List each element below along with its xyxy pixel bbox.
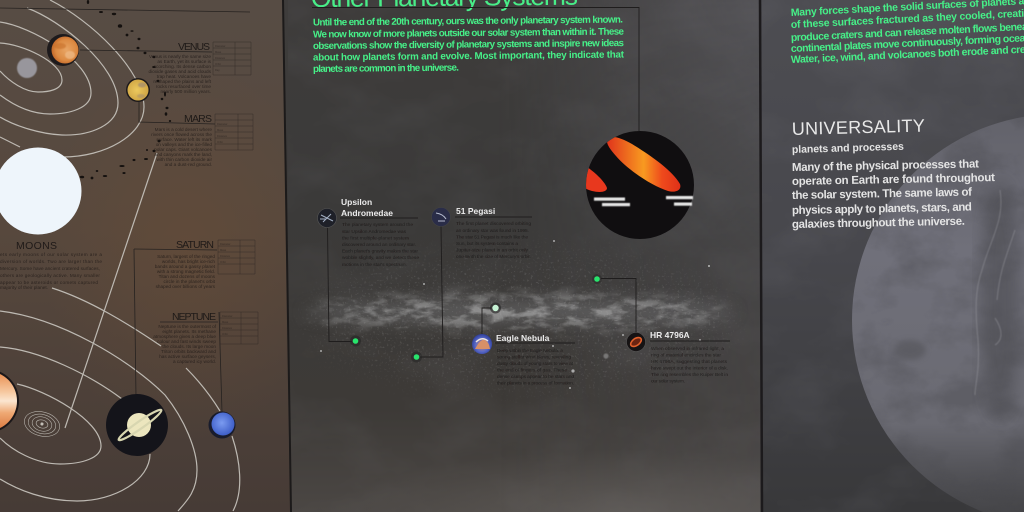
universality body text: operate on Earth are found throughout [792, 172, 995, 188]
surfaces text [791, 0, 1024, 66]
system: Eagle Nebula: the end of fingers of gas. These [497, 368, 567, 374]
central small disk [17, 58, 37, 78]
intro text: Until the end of the 20th century, ours was the only planetary system known. [313, 15, 623, 28]
label: Saturn: shaped over billions of years [156, 284, 216, 289]
system: 51 Pegasi: one-tenth the size of Mercury's orbit. [456, 254, 531, 260]
label: Venus: VENUS [178, 41, 210, 53]
label: Mars: with thin carbon dioxide air [156, 157, 212, 162]
panel: other planetary systems [283, 0, 762, 512]
table: Neptune: Mass [222, 320, 229, 324]
image: hot planet disks [582, 131, 694, 239]
structural lines [0, 8, 250, 412]
background planet [850, 110, 1024, 512]
system: 51 Pegasi: an ordinary star was found in 1995. [456, 228, 529, 234]
label: Venus: scorching. Its dense carbon [154, 64, 211, 69]
universality body text [792, 158, 995, 231]
planet: Neptune [208, 412, 236, 438]
system: HR 4796A: The ring resembles the Kuiper Belt in [651, 372, 728, 378]
label: Mars: on valleys and the ice-filled [156, 142, 212, 147]
lighter floor of panel [292, 412, 760, 512]
system: Eagle Nebula: Eagle Nebula [496, 333, 550, 343]
label: Moons: MOONS [16, 240, 57, 252]
label: Moons: majority of their planet. [0, 285, 48, 290]
table: Saturn [218, 240, 255, 274]
label: Mars: MARS [184, 113, 212, 125]
label: Neptune [153, 311, 217, 364]
planet: Saturn [106, 394, 168, 456]
table: Neptune: Diameter [222, 314, 233, 318]
system: Upsilon Andromedae: Andromedae [341, 208, 393, 218]
system: Eagle Nebula: dense clumps appear to be stars and [497, 374, 574, 380]
system: HR 4796A: HR 4796A [650, 330, 690, 340]
label: Neptune: Triton orbits backward and [161, 349, 216, 354]
sun [0, 148, 82, 234]
label: Mars: Mars is a cold desert where [155, 127, 212, 132]
system: HR 4796A: ring of material encircles the star [651, 352, 721, 358]
system: Upsilon Andromedae: Upsilon [341, 197, 372, 207]
universality body text: galaxies throughout the universe. [792, 216, 965, 231]
label: Neptune: has active surface geysers, [159, 354, 216, 359]
label: Neptune: a captured icy world. [173, 359, 216, 364]
table: Venus: Diameter [215, 44, 226, 48]
label: Neptune: the clouds. Its large moon [162, 344, 216, 349]
system: Upsilon Andromedae: the first multiple-planet system [342, 236, 409, 242]
label: Mars: polar caps. Giant volcanoes [154, 147, 213, 152]
system: 51 Pegasi: Sun, but its system contains a [456, 241, 518, 247]
label: Moons: others are geologically active. Many smaller [0, 273, 100, 278]
system: HR 4796A: our solar system. [651, 378, 685, 384]
label: Saturn: bands around a gassy planet [155, 264, 216, 269]
table: Venus: Day [215, 68, 220, 72]
label: Venus [148, 41, 212, 94]
label: Mars: rivers once flowed across the [151, 132, 212, 137]
table: Saturn: Distance [220, 254, 231, 258]
connector lines [328, 226, 636, 357]
system: Eagle Nebula: dusty clouds of young stars to view at [497, 361, 574, 367]
label: Venus: nearly 500 million years. [160, 89, 211, 94]
table: Mars: Diameter [217, 122, 228, 126]
universality body text: physics apply to planets, stars, and [792, 202, 972, 217]
table: Mars: Mass [217, 128, 224, 132]
system: Upsilon Andromedae: star Upsilon Andromedae was [342, 229, 407, 235]
label: Saturn: Titan and dozens of moons [159, 274, 216, 279]
asteroid belt [80, 0, 171, 179]
orbit center target [22, 408, 62, 440]
universality body text: Many of the physical processes that [792, 158, 979, 174]
system: 51 Pegasi: The star 51 Pegasi is much like the [456, 234, 528, 240]
label: Saturn: with a strong magnetic field. [157, 269, 215, 274]
system: Upsilon Andromedae: Each planet's gravity makes the star [342, 248, 418, 254]
table: Saturn: Orbit [220, 260, 226, 264]
label: Mars: surface. Water left its mark [156, 137, 213, 142]
system: Eagle Nebula [472, 333, 575, 386]
table: Mars [215, 114, 253, 150]
table: Venus: Distance [215, 56, 226, 60]
table: Neptune [220, 312, 258, 344]
table: Mars: Orbit [217, 140, 223, 144]
label: Venus: reshaped the plains and left [153, 79, 212, 84]
table: Venus: Orbit [215, 62, 221, 66]
label: Venus: Venus is nearly the same size [149, 54, 211, 59]
label: Neptune: NEPTUNE [172, 311, 216, 323]
label: Mars: and canyons mark the land, [154, 152, 212, 157]
label: Moons: ets early moons of our solar system are a [0, 252, 102, 257]
label: Neptune: colour and fast winds sweep [157, 339, 216, 344]
label: Venus: dioxide gases and acid clouds [148, 69, 212, 74]
label: Saturn: circle in the planet's orbit [164, 279, 216, 284]
label: Moons: Mercury. Some have ancient cratered surfaces, [0, 266, 100, 271]
label: Venus: as Earth, yet its surface is [157, 59, 212, 64]
orbit lines [0, 0, 240, 511]
label: Moons: appear to be asteroids or comets captured [0, 280, 98, 285]
table: Neptune: Orbit [222, 332, 228, 336]
label: Neptune: atmosphere gives a deep blue [153, 334, 216, 339]
system: Upsilon Andromedae: motions in the star's spectrum. [342, 262, 407, 268]
system: Upsilon Andromedae: The planetary system around the [342, 222, 413, 228]
table: Venus [213, 42, 251, 75]
panel: solar system [0, 0, 292, 512]
table: Saturn: Mass [220, 248, 227, 252]
system: Upsilon Andromedae: discovered around an ordinary star. [342, 242, 416, 248]
planet: Venus [47, 34, 79, 66]
intro text: observations show the diversity of planetary systems and inspire new ideas [313, 38, 625, 52]
label: Saturn: worlds, has bright ice-rich [162, 259, 215, 264]
universality body text: the solar system. The same laws of [792, 187, 972, 202]
label: Saturn [155, 239, 216, 289]
label: Saturn: Saturn, largest of the ringed [157, 254, 215, 259]
subheading: planets and processes [792, 141, 904, 156]
table: Mars: Distance [217, 134, 228, 138]
system: Eagle Nebula: their planets in a process of formation. [497, 380, 574, 386]
panel seams [283, 0, 762, 512]
intro text: planets are common in the universe. [313, 63, 459, 75]
system: 51 Pegasi: The first planet discovered orbiting [456, 221, 531, 227]
label: Mars: and a dust-red ground. [165, 162, 212, 167]
system: 51 Pegasi: 51 Pegasi [456, 206, 495, 216]
system: HR 4796A [626, 330, 730, 384]
system: Eagle Nebula: strong stellar wind blows, revealing [497, 354, 571, 360]
system: 51 Pegasi [432, 206, 532, 260]
label: Mars [151, 113, 213, 167]
milky way band [306, 240, 735, 392]
label: Saturn: SATURN [176, 239, 214, 251]
intro text [313, 15, 625, 75]
system: HR 4796A: HR 4796A, suggesting that planets [651, 359, 728, 365]
system: HR 4796A: have swept out the interior of a disk. [651, 366, 728, 372]
system: Eagle Nebula: Deep within the Eagle Nebula, a [497, 348, 563, 354]
planet: Jupiter [0, 369, 19, 433]
table: Saturn: Diameter [220, 242, 231, 246]
planet: Mars [126, 78, 150, 102]
system: HR 4796A: When observed in infrared light, a [651, 346, 724, 352]
marker dots [350, 274, 602, 362]
system: Upsilon Andromedae [318, 197, 419, 268]
label: Venus: trap heat. Volcanoes have [157, 74, 211, 79]
label: Moons [0, 240, 102, 290]
intro text: about how planets form and evolve. Most important, they indicate that [313, 50, 625, 63]
system: Upsilon Andromedae: wobble slightly, and we detect these [342, 255, 419, 261]
intro text: We now know of more planets outside our solar system than within it. These [313, 27, 625, 40]
panel: universality [760, 0, 1024, 512]
system: 51 Pegasi: Jupiter-size planet in an orbit only [456, 248, 529, 254]
label: Moons: diversion of worlds. Two are larger than the [0, 259, 102, 264]
label: Neptune: Neptune is the outermost of [158, 324, 217, 329]
table: Venus: Mass [215, 50, 222, 54]
heading: universality: UNIVERSALITY [792, 116, 925, 139]
table: Neptune: Distance [222, 326, 233, 330]
label: Neptune: eight planets. Its methane [162, 329, 216, 334]
label: Venus: rocks resurfaced over time [156, 84, 211, 89]
